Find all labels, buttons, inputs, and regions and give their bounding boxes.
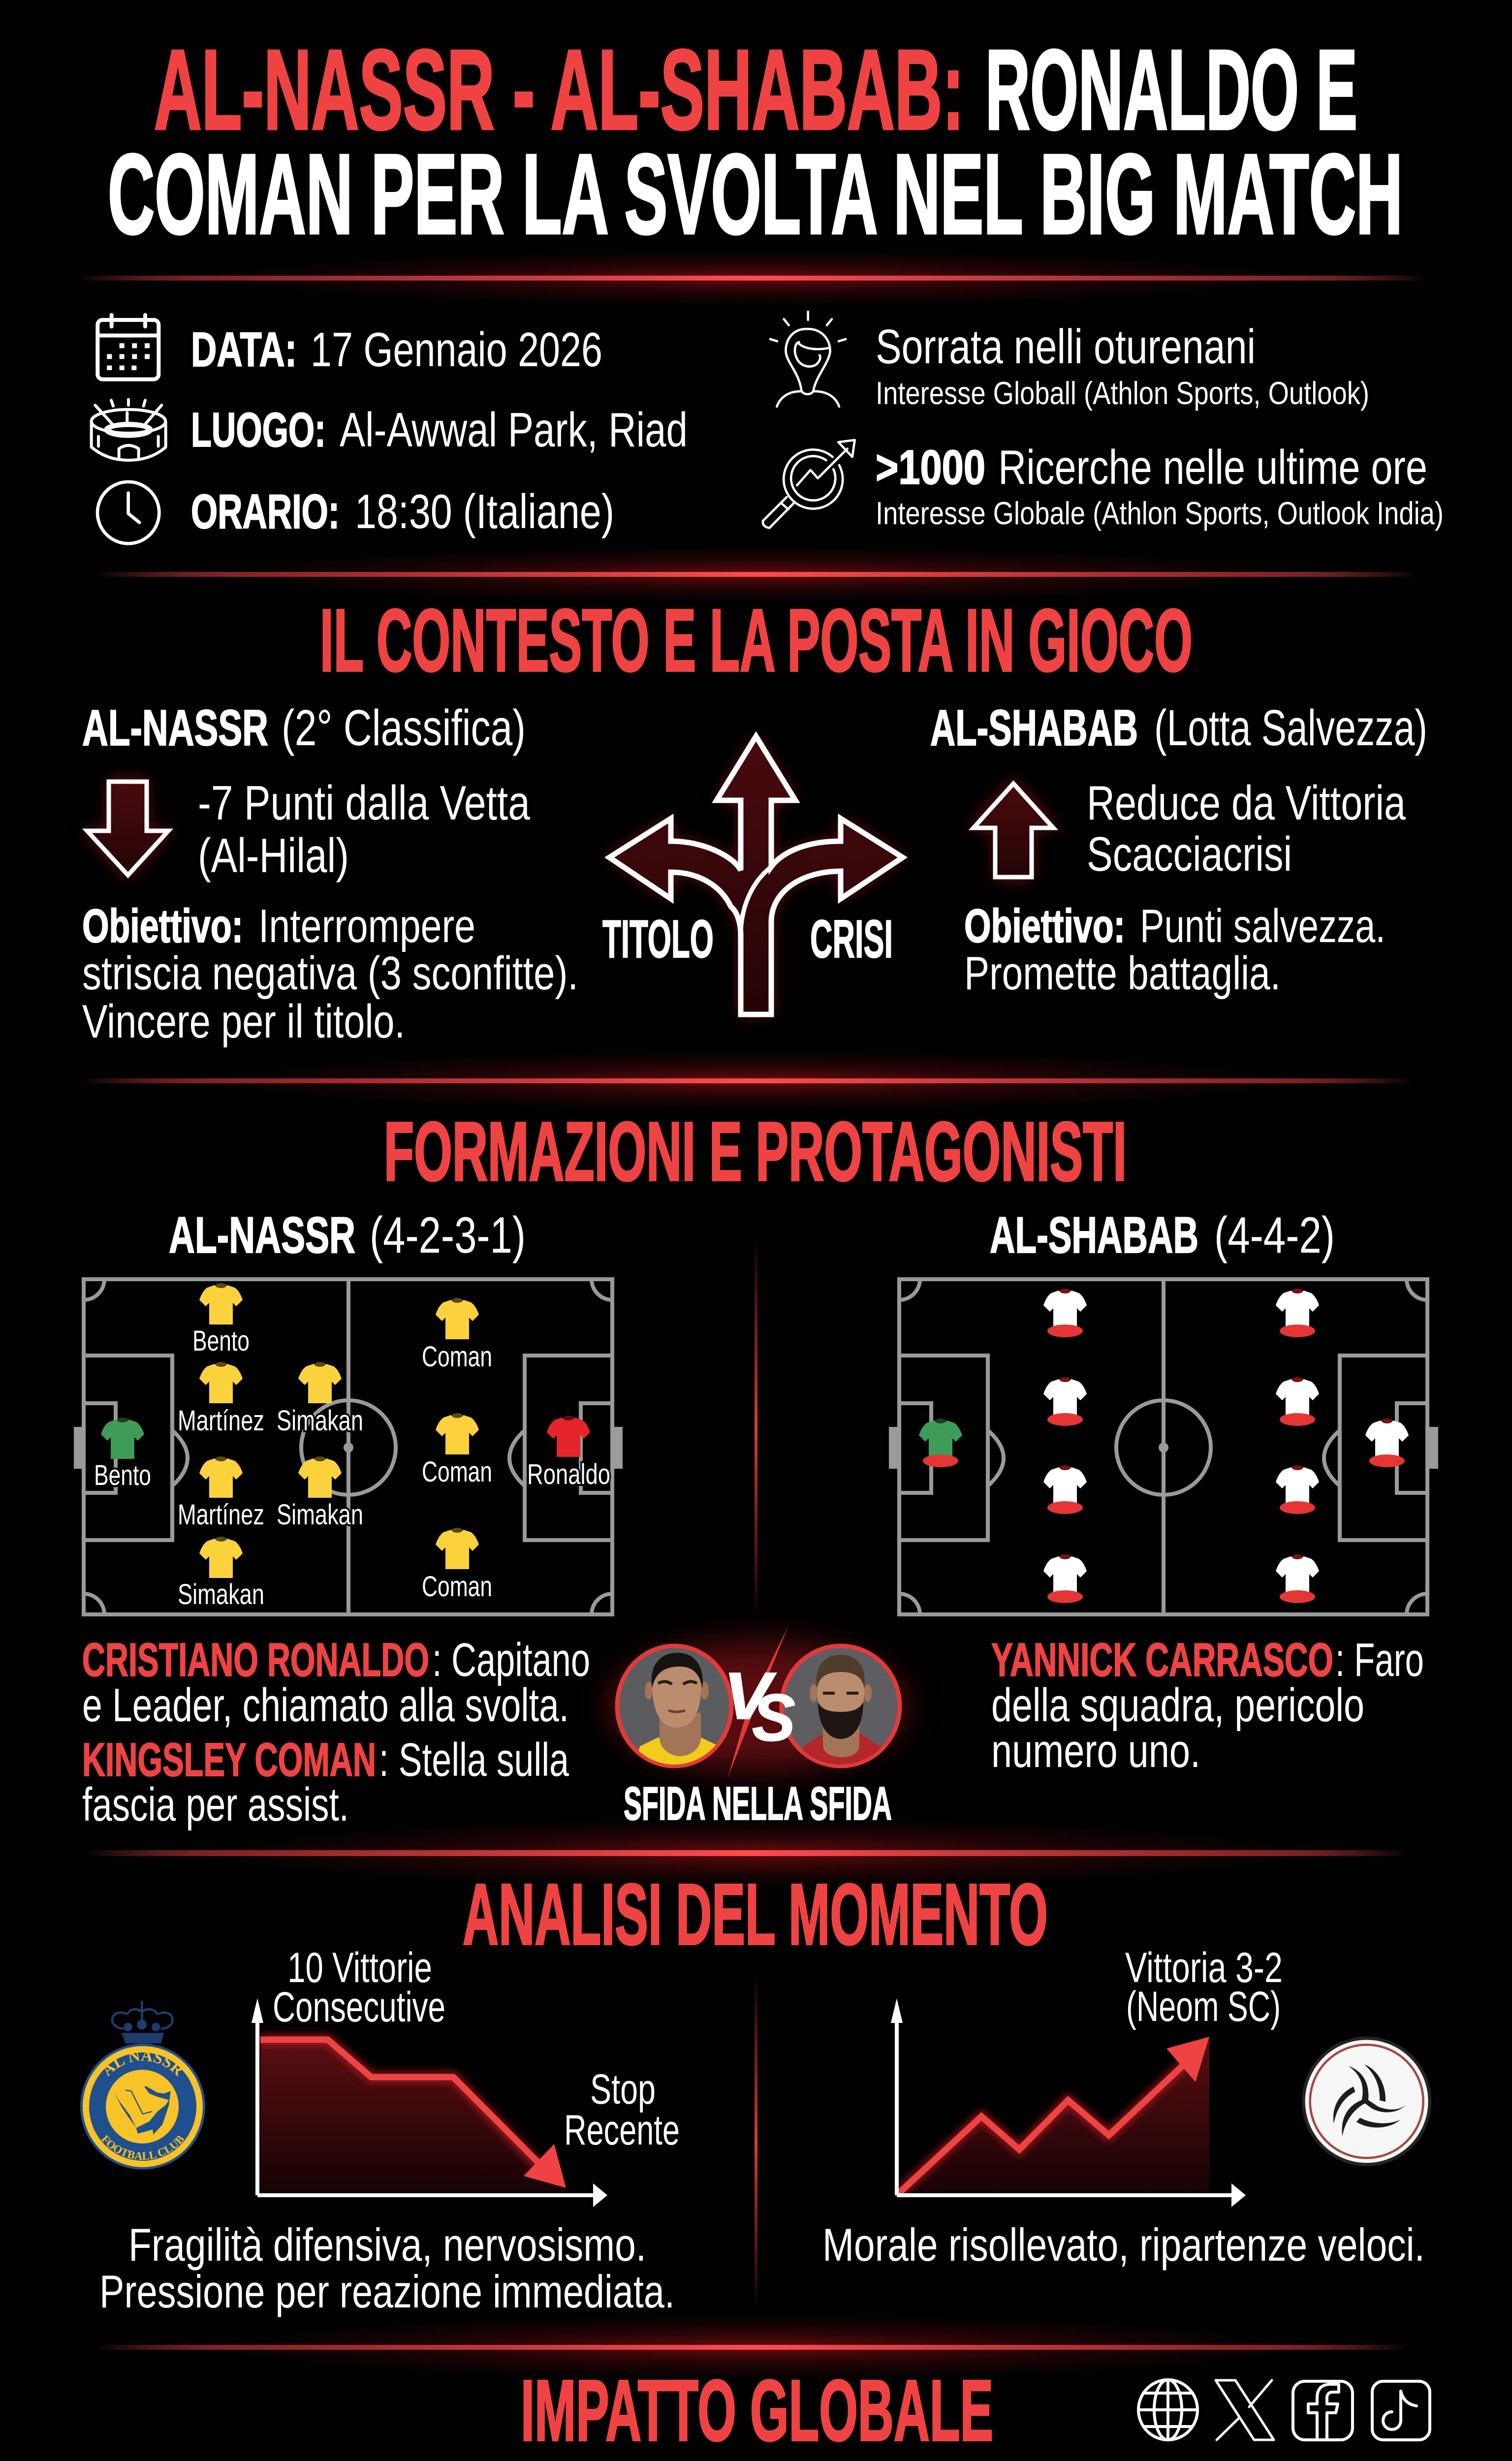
team status: AL-NASSR [82, 699, 268, 756]
player marker: right column 4 [1276, 1554, 1319, 1603]
player marker: right column 1 [1276, 1289, 1319, 1337]
objective [964, 900, 1386, 1000]
player: Martinez 2 [178, 1456, 264, 1531]
VS letters: S [752, 1680, 795, 1755]
icon: TikTok [1372, 2381, 1430, 2440]
time text: ORARIO: [191, 484, 340, 538]
stat 1 text: Sorrata nelli oturenani [876, 319, 1256, 374]
player: Coman 1 [422, 1298, 492, 1373]
player: Simakan 2 [277, 1456, 363, 1531]
title: AL-NASSR - AL-SHABAB: [154, 26, 964, 153]
player: Ronaldo [527, 1416, 610, 1490]
pitch [74, 1279, 623, 1614]
panel: key player Al-Shabab [991, 1634, 1424, 1777]
player: Coman 3 [422, 1528, 492, 1603]
location text [191, 403, 688, 457]
player: Martinez 1 [178, 1362, 264, 1437]
portrait: Carrasco [782, 1646, 900, 1772]
team status [930, 699, 1427, 756]
time text [191, 484, 614, 538]
player marker: right column 2 [1276, 1377, 1319, 1426]
stat 2 text [876, 440, 1444, 531]
objective [82, 900, 578, 1048]
icon: search trend [763, 440, 855, 528]
panel: match details [92, 315, 688, 543]
chart annotation: ten wins: 10 Vittorie [287, 1944, 432, 1991]
panel: key player Al-Shabab: YANNICK CARRASCO [991, 1634, 1333, 1686]
objective: Vincere per il titolo. [82, 995, 405, 1048]
label: crisi: CRISI [810, 909, 893, 969]
chart annotation: win [1125, 1944, 1283, 2030]
team status: (Lotta Salvezza) [1154, 699, 1427, 756]
panel: Al-Shabab formation [889, 1207, 1438, 1614]
player: Simakan 1 [277, 1362, 363, 1437]
Kingsley Coman text [82, 1734, 569, 1831]
chart annotation: ten wins: Consecutive [273, 1984, 445, 2031]
player marker: left column 1 [1043, 1289, 1087, 1337]
title [108, 26, 1403, 257]
slash [728, 1627, 788, 1777]
formation title: (4-4-2) [1214, 1207, 1335, 1264]
time text: 18:30 (Italiane) [355, 484, 614, 538]
Kingsley Coman text: fascia per assist. [82, 1778, 349, 1831]
date text [191, 322, 602, 377]
player: Coman 2: Coman [422, 1456, 492, 1488]
Al-Nassr analysis text: Fragilità difensiva, nervosismo. [128, 2219, 646, 2271]
formation title: AL-NASSR [169, 1207, 355, 1264]
objective: striscia negativa (3 sconfitte). [82, 947, 578, 1000]
stat 2 text: >1000 [876, 440, 985, 494]
date text: DATA: [191, 322, 297, 377]
Kingsley Coman text: KINGSLEY COMAN [82, 1734, 376, 1786]
player marker: forward [1365, 1419, 1409, 1467]
pitch [889, 1279, 1438, 1614]
objective: Obiettivo: [964, 900, 1125, 952]
icon: down arrow [84, 780, 172, 878]
icon: clock [97, 482, 159, 543]
chart: Al-Nassr decline [252, 1998, 607, 2207]
logo: Al-Nassr [80, 2001, 205, 2170]
player: Simakan 1: Simakan [277, 1405, 363, 1437]
panel: Al-Nassr context [82, 699, 578, 1048]
VS letters [724, 1659, 795, 1755]
player: Simakan 3: Simakan [178, 1578, 264, 1610]
team status [82, 699, 526, 756]
chart annotation: ten wins [273, 1944, 445, 2031]
heading: analysis: ANALISI DEL MOMENTO [463, 1866, 1048, 1963]
points gap: -7 Punti dalla Vetta [198, 776, 530, 830]
recent form: Reduce da Vittoria [1087, 776, 1406, 830]
Al-Nassr analysis text [99, 2219, 675, 2317]
player: Simakan 3 [178, 1537, 264, 1610]
Cristiano Ronaldo text [82, 1634, 590, 1732]
Al-Nassr analysis text: Pressione per reazione immediata. [99, 2266, 675, 2317]
player: Bento [192, 1283, 250, 1357]
panel: Al-Shabab context [930, 699, 1427, 1000]
panel: interest stats [763, 312, 1444, 531]
VS letters: V [724, 1659, 777, 1733]
stat 1 text: Interesse Globall (Athlon Sports, Outlook) [876, 375, 1369, 411]
label: titolo: TITOLO [602, 909, 714, 969]
chart annotation: recent stop [564, 2066, 680, 2154]
player: Coman 2 [422, 1413, 492, 1488]
heading: global impact: IMPATTO GLOBALE [521, 2363, 993, 2459]
icon: crossroads arrows [609, 736, 903, 1014]
formation title: AL-SHABAB [990, 1207, 1198, 1264]
objective: Promette battaglia. [964, 947, 1281, 1000]
chart annotation: recent stop: Stop [590, 2066, 656, 2113]
Cristiano Ronaldo text: CRISTIANO RONALDO [82, 1634, 429, 1686]
objective: Interrompere [258, 900, 475, 952]
recent form: Scacciacrisi [1087, 827, 1292, 881]
player: goalkeeper Bento [94, 1418, 151, 1491]
date text: 17 Gennaio 2026 [311, 322, 602, 377]
formation title: (4-2-3-1) [370, 1207, 526, 1264]
player: Bento: Bento [192, 1325, 250, 1357]
player marker: left column 3 [1043, 1465, 1087, 1514]
icon: idea head [770, 312, 846, 407]
chart annotation: recent stop: Recente [564, 2107, 680, 2154]
icon: web globe [1138, 2380, 1197, 2440]
panel: key player Al-Shabab: della squadra, pericolo [991, 1679, 1364, 1732]
player: Simakan 2: Simakan [277, 1499, 363, 1531]
portrait: Ronaldo [617, 1646, 731, 1772]
chart annotation: win: Vittoria 3-2 [1125, 1944, 1283, 1991]
panel: key players Al-Nassr [82, 1634, 590, 1831]
logo: Al-Nassr: FOOTBALL CLUB [101, 2134, 184, 2160]
player marker: goalkeeper [919, 1419, 962, 1467]
location text: Al-Awwal Park, Riad [340, 403, 688, 457]
icon: Facebook [1293, 2381, 1353, 2440]
panel: key player Al-Shabab: numero uno. [991, 1725, 1200, 1777]
objective: Punti salvezza. [1140, 900, 1386, 952]
caption: SFIDA NELLA SFIDA [624, 1777, 892, 1830]
team status: AL-SHABAB [930, 699, 1138, 756]
player: Martinez 2: Martínez [178, 1499, 264, 1531]
logo: Al-Shabab [1302, 2037, 1431, 2166]
icon: calendar [97, 315, 158, 379]
team status: (2° Classifica) [282, 699, 526, 756]
player: Ronaldo: Ronaldo [527, 1458, 610, 1490]
icon: X [1216, 2380, 1274, 2440]
player: Coman 3: Coman [422, 1571, 492, 1603]
panel: key player Al-Shabab: : Faro [1335, 1634, 1424, 1686]
recent form [1087, 776, 1406, 881]
player marker: left column 2 [1043, 1377, 1087, 1426]
logo: Al-Nassr: AL NASSR [105, 2052, 182, 2077]
player: Coman 1: Coman [422, 1341, 492, 1373]
objective: Obiettivo: [82, 900, 243, 952]
social icons [1138, 2380, 1430, 2440]
player: goalkeeper Bento: Bento [94, 1459, 151, 1491]
points gap [198, 776, 530, 883]
icon: up arrow [969, 780, 1058, 879]
points gap: (Al-Hilal) [198, 828, 349, 883]
versus graphic [610, 1627, 906, 1830]
chart annotation: win: (Neom SC) [1126, 1983, 1281, 2030]
icon: stadium [92, 400, 166, 460]
Kingsley Coman text: : Stella sulla [379, 1734, 569, 1786]
Cristiano Ronaldo text: e Leader, chiamato alla svolta. [82, 1679, 569, 1732]
location text: LUOGO: [191, 403, 326, 457]
chart: Al-Shabab rise [891, 1998, 1246, 2207]
panel: Al-Nassr formation [74, 1207, 623, 1614]
player marker: left column 4 [1043, 1554, 1087, 1603]
player marker: right column 3 [1276, 1465, 1319, 1514]
player: Martinez 1: Martínez [178, 1405, 264, 1437]
stat 1 text [876, 319, 1369, 411]
Cristiano Ronaldo text: : Capitano [432, 1634, 590, 1686]
